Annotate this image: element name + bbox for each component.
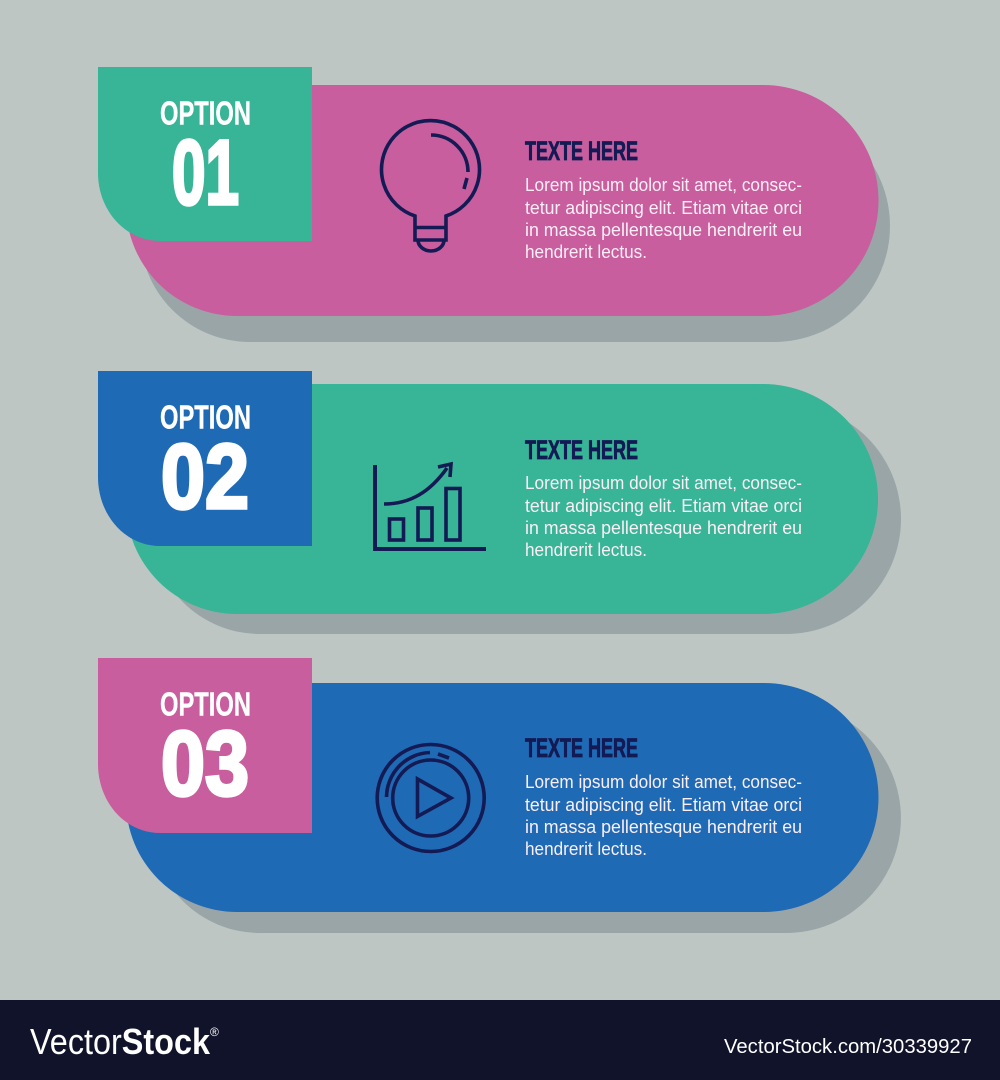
tab label: OPTION <box>160 686 251 722</box>
icon: play button <box>377 744 484 852</box>
body text 1: hendrerit lectus. <box>525 242 647 262</box>
text block 2 <box>525 435 802 560</box>
body text 3: in massa pellentesque hendrerit eu <box>525 817 802 837</box>
text block 3 <box>525 733 802 859</box>
icon: light bulb <box>381 121 480 251</box>
tab number: 02 <box>161 426 249 528</box>
body text 1: tetur adipiscing elit. Etiam vitae orci <box>525 198 802 218</box>
footer logo: VectorStock <box>30 1021 211 1062</box>
footer url: VectorStock.com/30339927 <box>724 1036 972 1058</box>
text block 1 <box>525 136 802 262</box>
body text 3: hendrerit lectus. <box>525 839 647 859</box>
tab shape green <box>98 67 312 241</box>
panel body green <box>126 384 878 614</box>
tab: option 01 <box>98 67 312 241</box>
body text 2 <box>525 473 802 560</box>
panel body pink <box>126 85 878 316</box>
tab label: OPTION <box>160 398 251 436</box>
body text 2: Lorem ipsum dolor sit amet, consec- <box>525 473 802 493</box>
tab shape pink <box>98 658 312 833</box>
body text 1: Lorem ipsum dolor sit amet, consec- <box>525 175 802 195</box>
registered mark: ® <box>210 1025 219 1039</box>
panel shadow 2 <box>151 404 901 634</box>
panel body blue <box>126 683 878 912</box>
footer background <box>0 1000 1000 1080</box>
tab: option 02 <box>98 371 312 546</box>
panel: option 01 <box>98 67 890 342</box>
heading 1: TEXTE HERE <box>525 136 638 166</box>
body text 1: in massa pellentesque hendrerit eu <box>525 220 802 240</box>
tab: option 03 <box>98 658 312 833</box>
tab number: 03 <box>161 713 249 815</box>
body text 2: hendrerit lectus. <box>525 540 647 560</box>
body text 3: tetur adipiscing elit. Etiam vitae orci <box>525 795 802 815</box>
heading 2: TEXTE HERE <box>525 435 638 465</box>
tab label: OPTION <box>160 94 251 132</box>
tab number: 01 <box>172 122 239 224</box>
icon: growth chart <box>375 464 486 549</box>
heading 3: TEXTE HERE <box>525 733 638 763</box>
panel: option 03 <box>98 658 901 933</box>
tab shape blue <box>98 371 312 546</box>
footer bar <box>0 1000 1000 1080</box>
body text 3: Lorem ipsum dolor sit amet, consec- <box>525 772 802 792</box>
panel shadow 3 <box>151 703 901 933</box>
body text 3 <box>525 772 802 859</box>
panel: option 02 <box>98 371 901 634</box>
body text 1 <box>525 175 802 262</box>
body text 2: tetur adipiscing elit. Etiam vitae orci <box>525 496 802 516</box>
panel shadow 1 <box>140 110 890 342</box>
body text 2: in massa pellentesque hendrerit eu <box>525 518 802 538</box>
